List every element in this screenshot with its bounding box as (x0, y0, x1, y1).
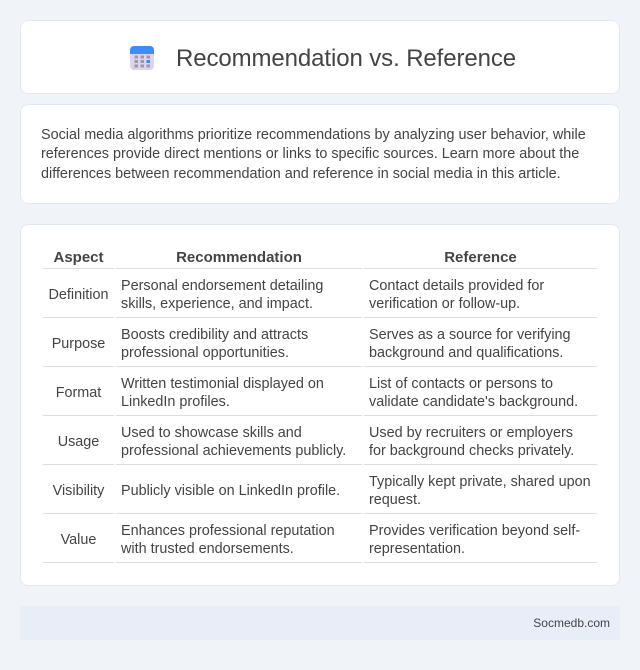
Purpose recommendation: professional opportunities. (121, 345, 289, 361)
intro text: Social media algorithms prioritize recommendations by analyzing user behavior, while (41, 127, 586, 143)
Usage recommendation (121, 425, 346, 459)
Visibility reference: Typically kept private, shared upon (369, 474, 591, 490)
Value reference (369, 523, 580, 557)
icon: calendar (130, 46, 154, 70)
Definition recommendation: Personal endorsement detailing (121, 278, 323, 294)
Purpose reference: Serves as a source for verifying (369, 327, 571, 343)
Usage reference: Used by recruiters or employers (369, 425, 573, 441)
Usage recommendation: professional achievements publicly. (121, 443, 346, 459)
Value recommendation (121, 523, 335, 557)
Usage reference: for background checks privately. (369, 443, 574, 459)
Value reference: Provides verification beyond self- (369, 523, 580, 539)
intro text: differences between recommendation and reference in social media in this article. (41, 166, 561, 182)
heading: Recommendation vs. Reference (176, 45, 516, 72)
Definition reference: verification or follow-up. (369, 296, 520, 312)
table header: Recommendation: Recommendation (176, 249, 302, 266)
table panel (20, 224, 620, 586)
row: Purpose: Purpose (52, 336, 105, 352)
Value recommendation: with trusted endorsements. (121, 541, 294, 557)
Definition recommendation (121, 278, 323, 312)
Visibility recommendation: Publicly visible on LinkedIn profile. (121, 483, 340, 499)
intro text (41, 127, 586, 182)
Visibility reference (369, 474, 591, 508)
Format reference: validate candidate's background. (369, 394, 578, 410)
Definition reference: Contact details provided for (369, 278, 544, 294)
intro panel (20, 104, 620, 204)
row: Definition: Definition (48, 287, 108, 303)
table header: Reference: Reference (444, 249, 517, 266)
Visibility reference: request. (369, 492, 421, 508)
Usage reference (369, 425, 574, 459)
Value recommendation: Enhances professional reputation (121, 523, 335, 539)
Format recommendation: LinkedIn profiles. (121, 394, 230, 410)
Purpose recommendation (121, 327, 308, 361)
row: Format: Format (56, 385, 101, 401)
table header: Aspect: Aspect (53, 249, 104, 266)
row: Value: Value (61, 532, 96, 548)
Definition recommendation: skills, experience, and impact. (121, 296, 313, 312)
Format reference (369, 376, 578, 410)
Value reference: representation. (369, 541, 465, 557)
Format recommendation (121, 376, 324, 410)
Purpose reference: background and qualifications. (369, 345, 563, 361)
intro text: references provide direct mentions or links to specific sources. Learn more about the (41, 146, 579, 162)
row: Visibility: Visibility (53, 483, 104, 499)
Purpose reference (369, 327, 571, 361)
row: Usage: Usage (58, 434, 99, 450)
Format recommendation: Written testimonial displayed on (121, 376, 324, 392)
Purpose recommendation: Boosts credibility and attracts (121, 327, 308, 343)
Usage recommendation: Used to showcase skills and (121, 425, 302, 441)
Definition reference (369, 278, 544, 312)
Format reference: List of contacts or persons to (369, 376, 553, 392)
footer (20, 606, 620, 640)
footer credit: Socmedb.com (533, 616, 610, 630)
title card (20, 20, 620, 94)
